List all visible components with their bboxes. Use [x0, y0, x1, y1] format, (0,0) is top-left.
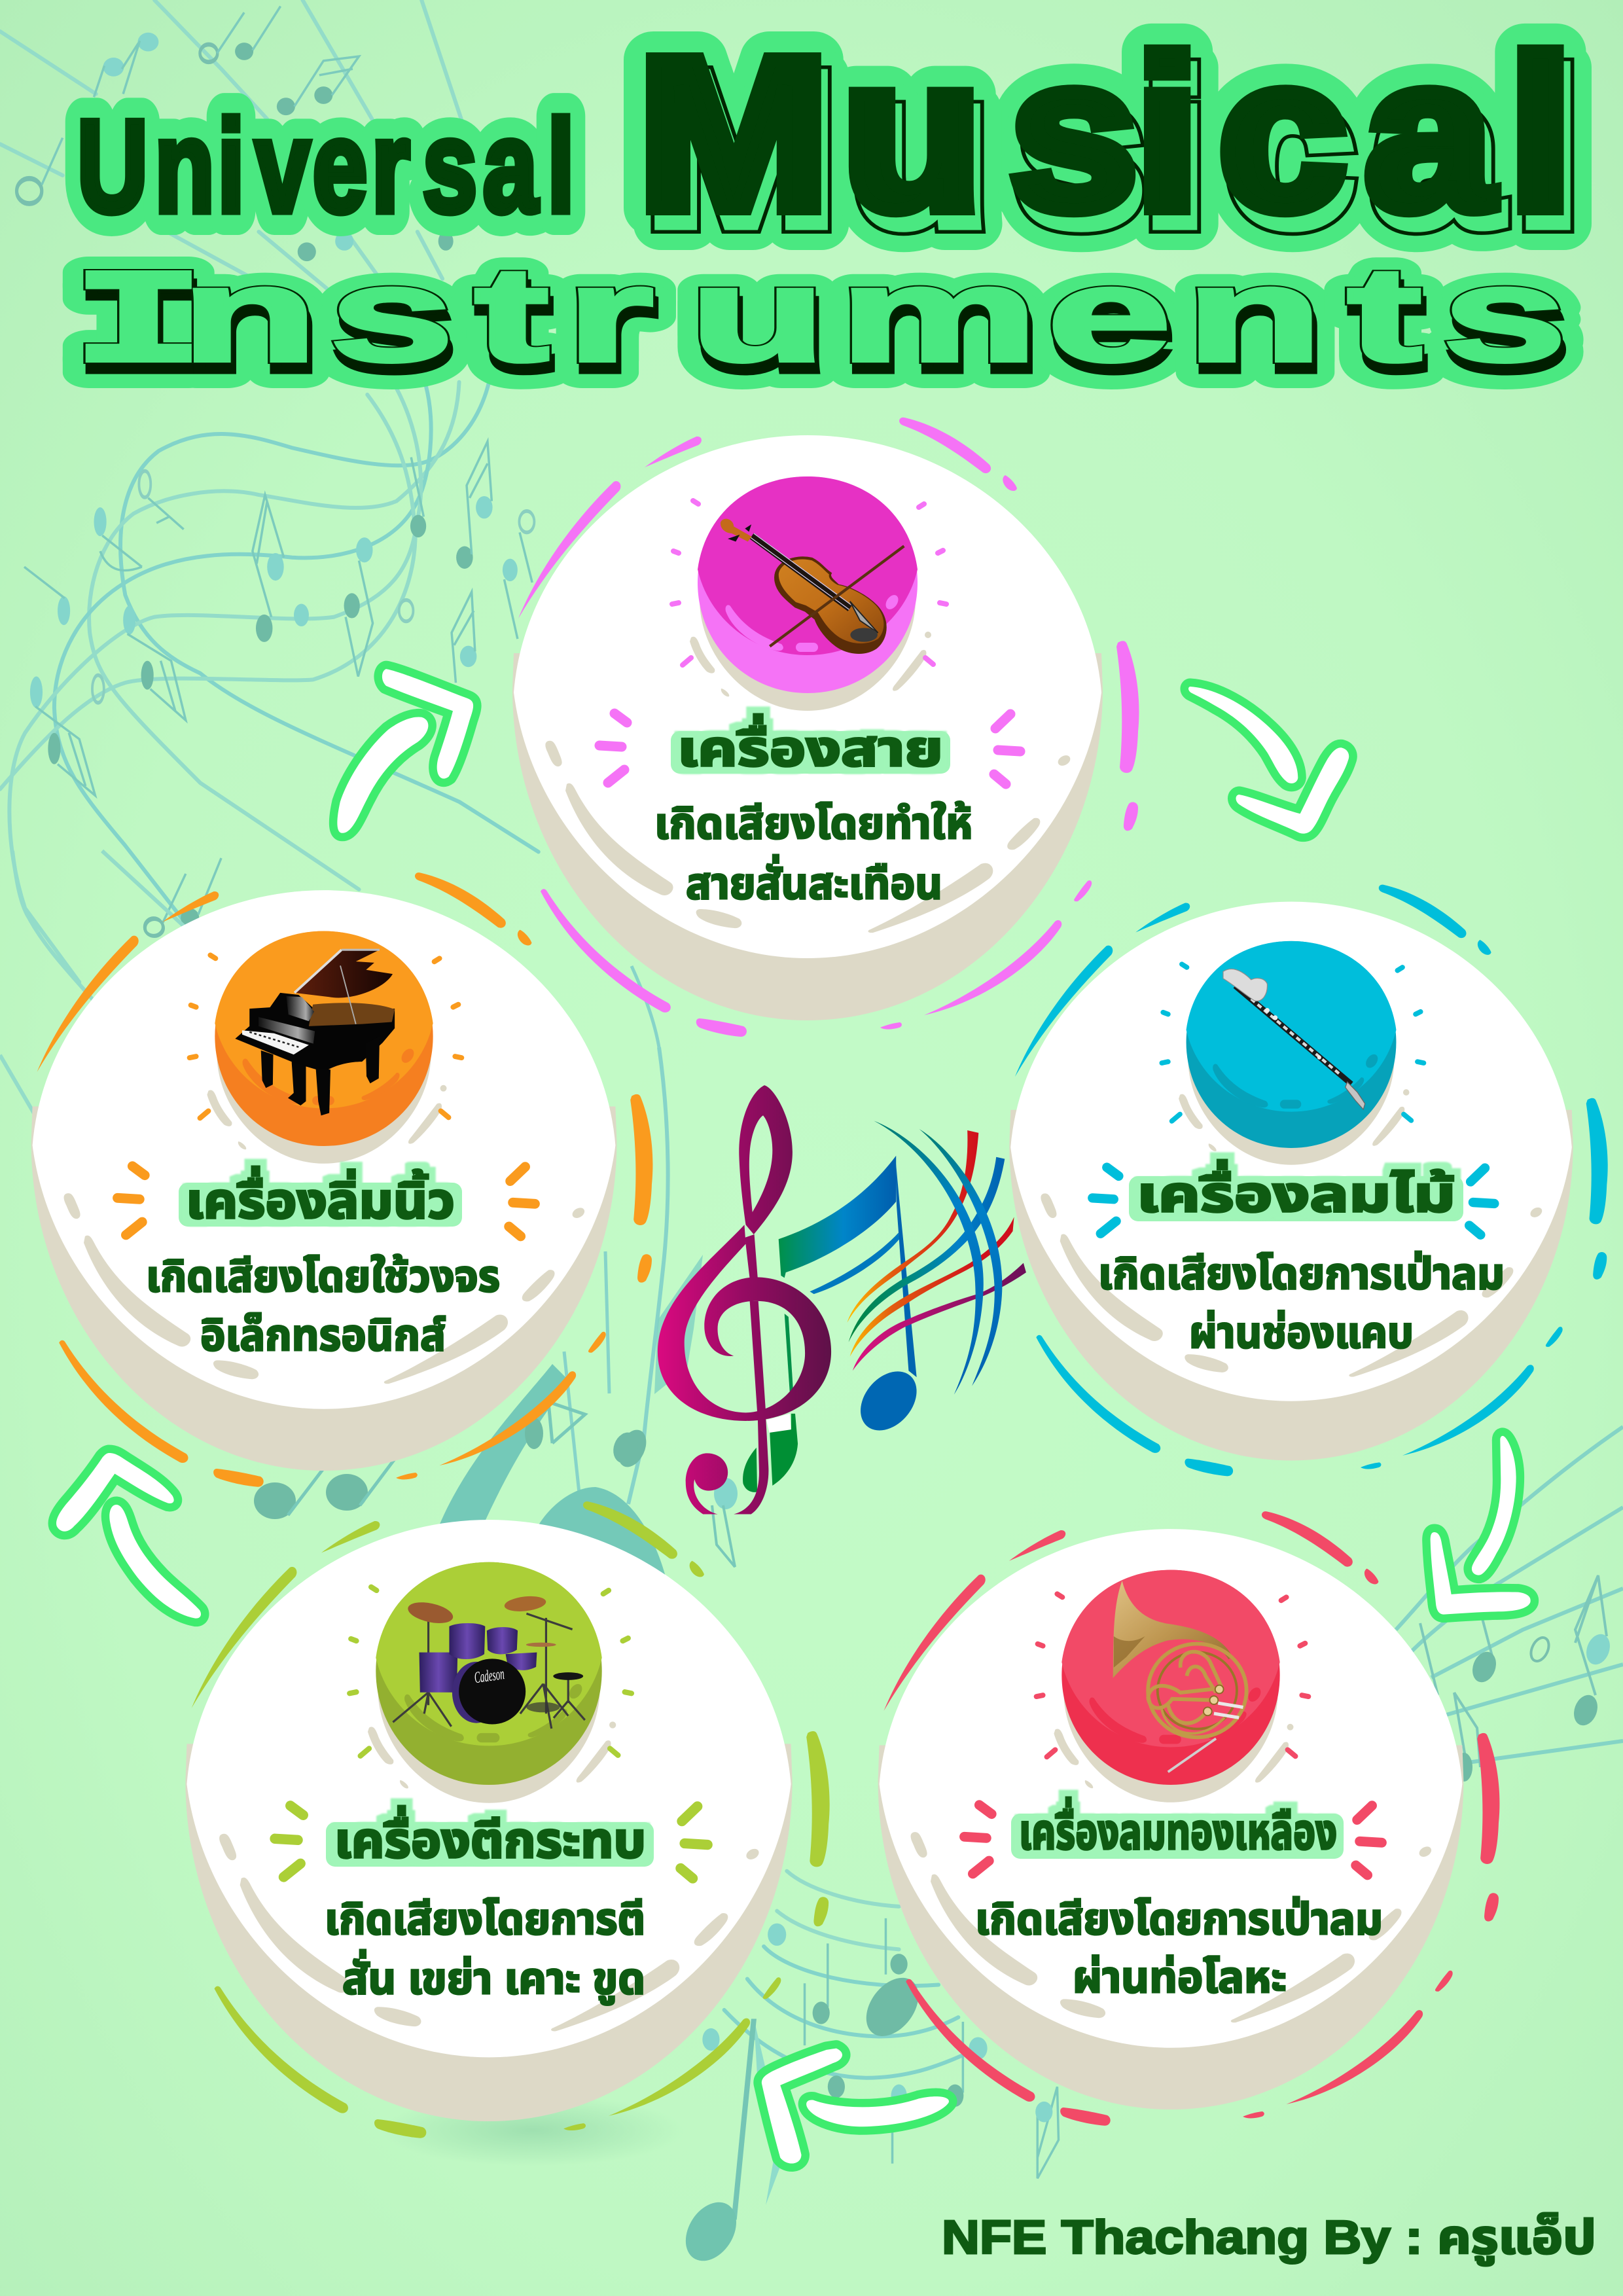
heading: woodwind: เครื่องลมไม้	[1137, 1160, 1455, 1223]
text: electronic description: อิเล็กทรอนิกส์	[200, 1311, 446, 1360]
title word: Instruments: I	[72, 261, 205, 413]
title word: Instruments: I	[72, 249, 205, 401]
treble clef	[658, 1085, 831, 1514]
title word: Musical: Musical	[638, 13, 1573, 255]
heading: strings	[671, 714, 950, 777]
title	[72, 13, 1580, 413]
title word: Instruments: nstruments	[181, 251, 1567, 401]
title word: Universal: Universal	[77, 94, 575, 240]
shadow under percussion disc	[382, 2094, 683, 2166]
icon: drum kit: Cadeson	[473, 1665, 505, 1687]
arrow: brass to percussion	[762, 2049, 949, 2164]
text: electronic description	[146, 1252, 500, 1360]
text: brass description	[975, 1895, 1383, 2002]
title word: Instruments: nstruments	[181, 240, 1567, 389]
footer credit: NFE Thachang By : ครูแอ็ป	[942, 2212, 1596, 2266]
text: brass description: เกิดเสียงโดยการเป่าลม	[975, 1895, 1383, 1944]
icon: french horn	[1113, 1581, 1247, 1772]
heading: electronic: เครื่องลิ่มนิ้ว	[186, 1166, 455, 1229]
music notes and swooshes	[743, 1121, 1026, 1492]
panel: strings (เครื่องสาย)	[512, 418, 1139, 1037]
text: brass description: ผ่านท่อโลหะ	[1073, 1953, 1287, 2002]
title word: Musical: Musical	[646, 29, 1580, 270]
title word: Instruments: nstruments	[181, 240, 1567, 389]
background: bottom center music staff	[678, 1871, 1058, 2262]
title word: Musical: Musical	[638, 13, 1573, 255]
background: center line and large teal note	[0, 851, 738, 1584]
icon: drum kit	[393, 1594, 585, 1729]
title word: Universal: Universal	[77, 94, 575, 240]
panel: percussion (เครื่องตีกระทบ)	[185, 1501, 830, 2138]
text: woodwind description: เกิดเสียงโดยการเป่าลม	[1098, 1249, 1505, 1299]
heading: percussion: เครื่องตีกระทบ	[334, 1806, 646, 1869]
title word: Musical: Musical	[646, 29, 1580, 270]
title word: Musical: Musical	[646, 29, 1580, 270]
panel: brass (เครื่องลมทองเหลือง)	[878, 1511, 1499, 2126]
title word: Instruments: I	[72, 249, 205, 401]
text: strings description	[654, 799, 972, 908]
arrow: woodwind to brass	[1431, 1436, 1531, 1615]
title word: Instruments: nstruments	[181, 240, 1567, 389]
panel: electronic (เครื่องลิ่มนิ้ว)	[31, 872, 652, 1487]
text: percussion description: สั่น เขย่า เคาะ ขูด	[342, 1949, 645, 2005]
text: strings description: สายสั่นสะเทือน	[686, 854, 942, 908]
arrow: percussion to electronic	[56, 1453, 201, 1619]
text: strings description: เกิดเสียงโดยทำให้	[654, 799, 972, 848]
heading: strings: เครื่องสาย	[677, 714, 943, 777]
text: percussion description	[325, 1895, 645, 2005]
heading: brass: เครื่องลมทองเหลือง	[1019, 1797, 1337, 1860]
title word: Instruments: nstruments	[184, 249, 1569, 399]
text: woodwind description	[1098, 1249, 1505, 1357]
center art: treble clef and music notes	[658, 1085, 1026, 1514]
title word: Instruments: I	[75, 259, 208, 411]
panel: woodwind (เครื่องลมไม้)	[1009, 885, 1608, 1476]
text: woodwind description: ผ่านช่องแคบ	[1189, 1308, 1414, 1357]
background: right music staff	[1396, 1427, 1623, 1782]
icon: violin	[721, 519, 904, 652]
heading: brass	[1011, 1797, 1344, 1860]
arrow: strings to woodwind	[1188, 687, 1349, 834]
title word: Instruments: I	[72, 249, 205, 401]
arrow: electronic to strings	[337, 669, 473, 833]
background: top-left music staff swirl	[0, 0, 539, 982]
text: percussion description: เกิดเสียงโดยการตี	[325, 1895, 645, 1944]
icon: grand piano	[235, 950, 395, 1115]
text: electronic description: เกิดเสียงโดยใช้วงจร	[146, 1252, 500, 1301]
heading: woodwind	[1129, 1160, 1463, 1223]
icon: clarinet	[1223, 969, 1365, 1109]
